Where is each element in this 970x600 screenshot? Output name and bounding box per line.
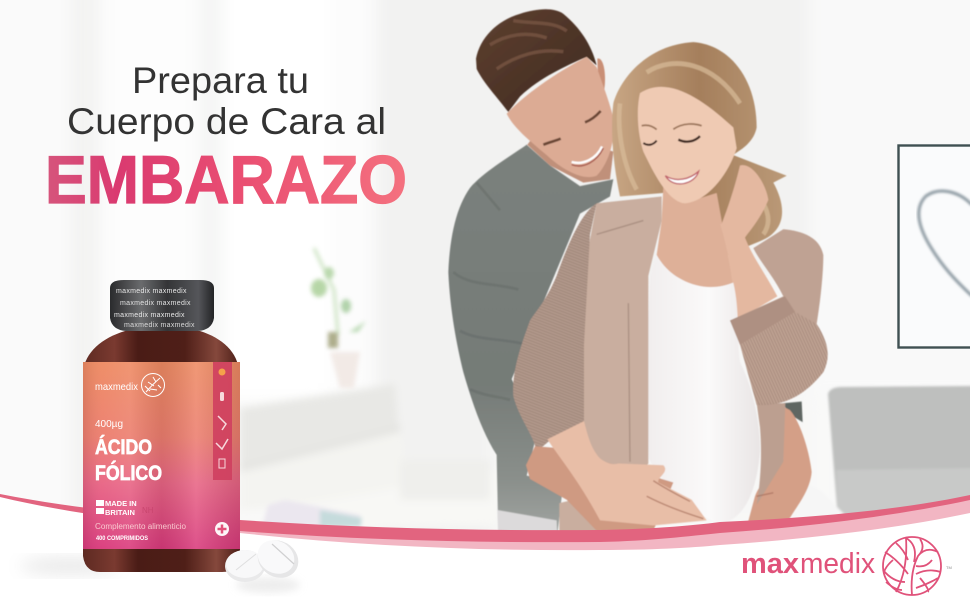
man's shirt hem bbox=[497, 510, 557, 541]
bottle cap: maxmedix maxmedix bbox=[116, 288, 187, 295]
bottle cap: maxmedix maxmedix bbox=[114, 312, 185, 319]
woman's left sleeve bbox=[513, 203, 597, 451]
man's neck bbox=[527, 128, 613, 183]
white lower panel bbox=[0, 497, 970, 600]
bottle cap: maxmedix maxmedix bbox=[120, 300, 191, 307]
label brand: maxmedix bbox=[95, 381, 139, 393]
label dose: 400µg bbox=[95, 419, 123, 430]
woman's neck and chest bbox=[657, 186, 733, 287]
blurred plant in vase bbox=[311, 248, 366, 388]
brand wordmark regular part: medix bbox=[800, 548, 875, 580]
icon strip bbox=[213, 362, 232, 480]
left sleeve knit bbox=[513, 203, 597, 451]
bottle cap: maxmedix maxmedix bbox=[124, 322, 195, 329]
book on bench bbox=[262, 500, 362, 527]
bottle label bbox=[83, 362, 240, 549]
photo: couple bbox=[448, 9, 828, 541]
man's hair strands bbox=[490, 21, 567, 69]
cardigan placket seam bbox=[597, 221, 643, 462]
man's left forearm bbox=[526, 446, 673, 531]
made in britain: MADE IN bbox=[105, 499, 137, 508]
leaf emblem bbox=[883, 537, 941, 595]
label description: Complemento alimenticio bbox=[95, 522, 187, 531]
made in britain: BRITAIN bbox=[105, 508, 135, 517]
man's eyes and smile bbox=[543, 111, 603, 166]
grey sofa bbox=[800, 386, 970, 525]
trademark mark: TM bbox=[946, 565, 952, 570]
woman's cardigan front left bbox=[559, 196, 662, 541]
white tee and belly bbox=[647, 255, 760, 524]
woman's cardigan right shoulder and sleeve bbox=[730, 229, 828, 405]
woman's hair bbox=[612, 42, 787, 255]
label brand bbox=[95, 374, 164, 396]
tablet left bbox=[225, 550, 265, 582]
woman's forearm and hand bbox=[547, 421, 707, 526]
title line 1: Prepara tu bbox=[132, 60, 309, 101]
made in britain: NH bbox=[142, 506, 154, 515]
brand logo bbox=[741, 537, 952, 595]
right sleeve knit bbox=[740, 312, 828, 405]
woman's raised arm and hand bbox=[720, 165, 777, 320]
bottle shadow bbox=[20, 558, 120, 574]
tablet right bbox=[251, 533, 305, 585]
title highlight word: EMBARAZO bbox=[45, 142, 407, 218]
woman's eyes and smile bbox=[642, 124, 702, 184]
brand wordmark bold part: max bbox=[741, 548, 799, 580]
finger lines bbox=[647, 481, 773, 519]
title bbox=[45, 60, 407, 218]
windowsill and bench bbox=[240, 384, 500, 530]
made in britain bbox=[96, 499, 154, 517]
medical cross badge bbox=[215, 522, 229, 536]
tablets bbox=[225, 533, 305, 593]
man's far sleeve bbox=[783, 401, 803, 422]
man's ear bbox=[597, 58, 605, 91]
shirt fold shading bbox=[453, 183, 527, 400]
woman's hair highlights bbox=[619, 64, 768, 234]
picture frame with heart bbox=[898, 146, 970, 348]
label product name: ÁCIDO bbox=[95, 436, 152, 459]
product bottle: FÓLICO bbox=[95, 461, 162, 485]
man's right hand bbox=[747, 407, 812, 527]
product bottle bbox=[83, 280, 240, 572]
bottle cap bbox=[110, 280, 214, 331]
label count: 400 COMPRIMIDOS bbox=[96, 535, 149, 542]
man's hair bbox=[476, 9, 597, 112]
man's face bbox=[507, 57, 614, 177]
woman's face bbox=[638, 87, 737, 203]
sleeve cuff bbox=[730, 296, 795, 345]
title line 2: Cuerpo de Cara al bbox=[67, 101, 386, 142]
pink curved band (light) bbox=[240, 500, 970, 600]
man's grey shirt bbox=[448, 145, 613, 541]
bottle glass bbox=[83, 331, 240, 572]
pink curved band (dark) bbox=[0, 494, 970, 600]
woman's cardigan front right bbox=[757, 403, 785, 505]
